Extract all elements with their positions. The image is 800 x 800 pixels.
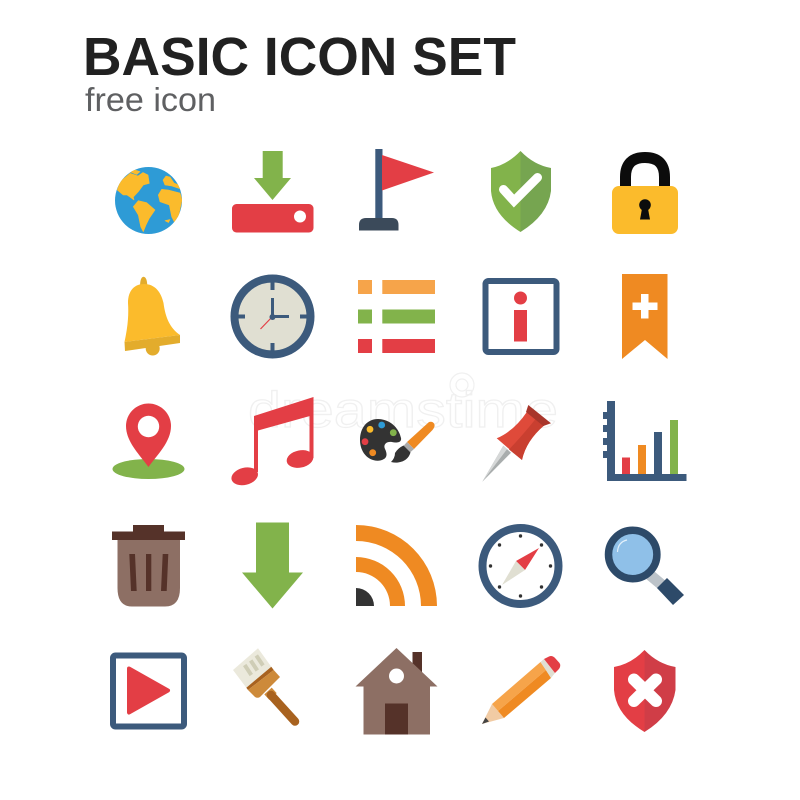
icon: palette and brush	[360, 419, 435, 463]
icon: rss feed	[356, 525, 437, 606]
icon: music note	[230, 397, 315, 488]
icon: flag	[359, 149, 434, 230]
icon: info box	[486, 281, 556, 352]
icon: push pin	[482, 405, 551, 482]
title: BASIC ICON SET	[83, 28, 516, 87]
icon: house	[356, 648, 438, 734]
icon: bar chart	[603, 401, 686, 481]
icon: list	[358, 280, 435, 353]
icon: shield with check	[491, 151, 551, 232]
subtitle: free icon	[85, 81, 216, 118]
icon: map pin	[112, 404, 184, 479]
icon: bell	[124, 277, 180, 356]
icon: download to drive	[232, 151, 314, 232]
icon: compass	[482, 528, 558, 604]
icon: magnifier	[608, 530, 684, 605]
icon: globe	[115, 167, 182, 234]
watermark: dreamstime	[248, 382, 558, 438]
icon: large down arrow	[242, 522, 303, 608]
icon: bookmark plus	[622, 274, 668, 359]
icon: pencil	[482, 656, 560, 724]
icon: shield with cross	[614, 650, 676, 732]
icon: play box	[113, 656, 184, 726]
icon: paint brush	[233, 648, 295, 722]
icon: clock	[234, 278, 310, 354]
icon: padlock	[612, 158, 678, 234]
icon: trash can	[112, 525, 185, 606]
